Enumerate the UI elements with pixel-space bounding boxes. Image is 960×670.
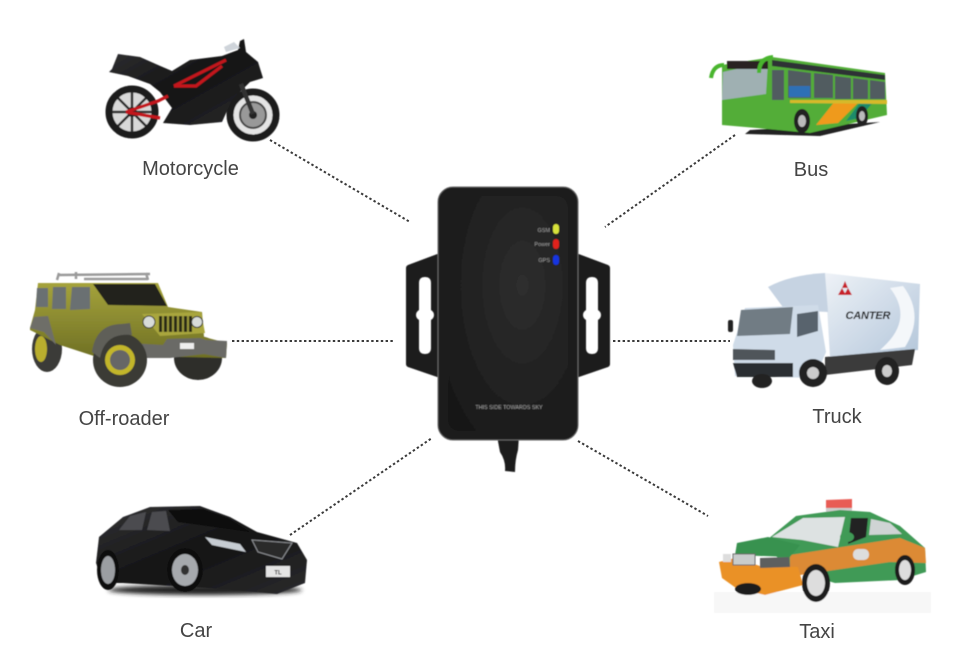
status LED: GPS [538, 255, 559, 265]
logo [838, 281, 852, 295]
mirrors [711, 57, 773, 78]
rear wheel [109, 89, 155, 135]
wheels [735, 555, 915, 602]
brand name: CANTER [846, 310, 891, 322]
vehicle: car [96, 506, 307, 595]
front panel [448, 196, 568, 431]
box swoosh [880, 286, 915, 350]
front wheel [93, 333, 147, 387]
teal stripe [846, 101, 874, 121]
chassis [825, 349, 915, 375]
status LED: Power: Power [534, 242, 550, 248]
body [722, 57, 887, 133]
status LED: GPS: GPS [538, 258, 550, 264]
ground shadow [108, 585, 302, 595]
photo background shade [714, 592, 931, 613]
rear wheel [32, 326, 62, 372]
orange stripe [816, 101, 860, 125]
body [30, 283, 227, 358]
mounting ear: left [406, 253, 440, 378]
label: Car: Car [180, 620, 212, 642]
front bumper [719, 558, 803, 595]
roof band [772, 60, 885, 80]
grille [142, 312, 205, 336]
connector: motorcycle to device [270, 140, 410, 222]
connector: taxi to device [578, 441, 708, 516]
vehicle: motorcycle [109, 39, 276, 138]
front wheel [230, 92, 276, 138]
windscreen [224, 42, 240, 52]
device body [438, 187, 578, 440]
roof rack [57, 272, 150, 280]
windscreen [93, 284, 167, 306]
headlights and grille [723, 554, 790, 568]
blue seats [789, 86, 810, 97]
red frame [126, 60, 226, 118]
headlight [205, 537, 246, 552]
wheels [752, 357, 899, 388]
status LED: Power [534, 239, 559, 249]
vehicle: bus [711, 57, 887, 136]
connector: bus to device [605, 135, 735, 227]
lower side trim [30, 316, 56, 345]
side window [797, 311, 818, 337]
cargo box [825, 273, 920, 357]
label: Off-roader: Off-roader [79, 408, 170, 430]
label: Motorcycle: Motorcycle [142, 158, 239, 180]
connector: truck to device [613, 340, 730, 342]
front wheel [167, 548, 203, 592]
body [96, 506, 307, 594]
windows [36, 287, 90, 310]
windscreen [168, 509, 250, 532]
far front wheel [174, 336, 222, 380]
cab [733, 305, 826, 378]
windscreen [722, 62, 768, 100]
status LED: GSM: GSM [537, 228, 550, 234]
plate [180, 343, 194, 349]
cable [497, 436, 519, 472]
rear wheel [97, 550, 119, 590]
hood [735, 537, 800, 557]
vehicle: off-roader [30, 272, 227, 387]
mirror [840, 532, 854, 542]
label: Truck: Truck [812, 406, 863, 428]
door emblem [853, 549, 869, 560]
grille [252, 540, 292, 559]
label: Taxi: Taxi [799, 621, 835, 643]
status LED: GSM [537, 224, 559, 234]
bodywork [109, 39, 263, 125]
roof sign [826, 499, 852, 512]
shadow [745, 122, 880, 136]
connector: car to device [290, 438, 432, 535]
front fork [241, 84, 253, 114]
grille [733, 349, 775, 360]
windscreen [737, 307, 793, 336]
destination display [727, 61, 768, 69]
device caption: THIS SIDE TOWARDS SKY [475, 405, 543, 411]
cab fairing [768, 273, 828, 312]
orange stripe [790, 538, 926, 575]
plate [266, 566, 290, 577]
side windows [772, 70, 885, 100]
plate: TL [274, 570, 282, 576]
side windows [119, 511, 170, 531]
wheels [794, 106, 868, 133]
bumper [127, 338, 227, 358]
vehicle: taxi [714, 499, 931, 613]
mounting ear: right [576, 253, 610, 378]
connector: off-roader to device [232, 340, 395, 342]
mirror [728, 320, 733, 332]
bumper [733, 363, 793, 377]
vehicle: truck [728, 273, 920, 388]
green lower and roof body [768, 510, 926, 583]
label: Bus: Bus [794, 159, 828, 181]
yellow band [790, 100, 887, 104]
wheel arch [92, 323, 132, 358]
windows [772, 517, 845, 547]
GPS tracker device [406, 187, 610, 472]
